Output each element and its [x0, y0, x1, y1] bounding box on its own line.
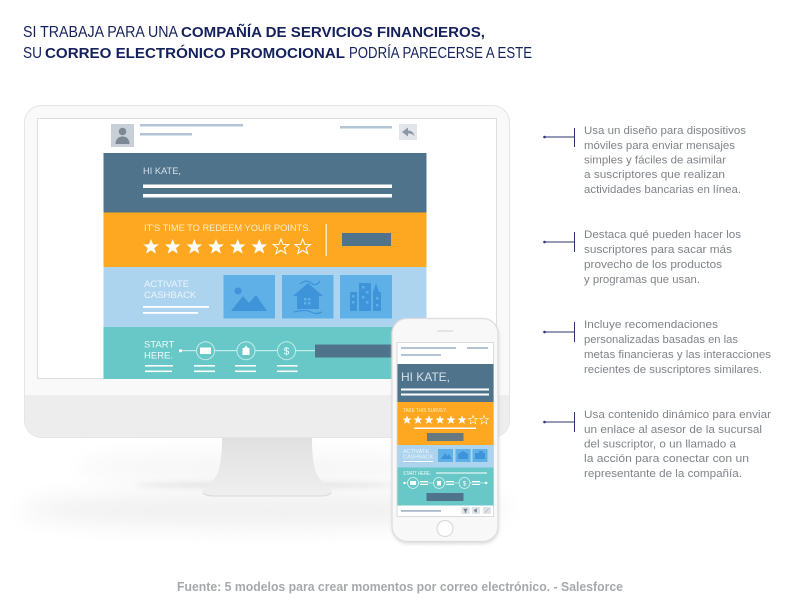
- callout text 3: Incluye recomendaciones: [584, 319, 719, 331]
- callout text 3: recientes de suscriptores similares.: [584, 364, 762, 376]
- title: SI TRABAJA PARA UNA: [23, 24, 179, 41]
- email band: redeem points: IT'S TIME TO REDEEM YOUR POINTS.: [144, 223, 311, 233]
- floor shadow: [20, 452, 510, 527]
- phone body: [392, 318, 499, 544]
- email band: activate cashback: [104, 267, 426, 327]
- callout text 1: Usa un diseño para dispositivos: [584, 125, 747, 137]
- email band: start here: HERE.: [144, 350, 173, 362]
- connector 1: [543, 128, 575, 147]
- callout text 2: provecho de los productos: [584, 259, 723, 271]
- star rating: [143, 239, 311, 254]
- phone band: cashback: [398, 445, 494, 468]
- callout text 2: [584, 229, 742, 286]
- phone header lines: [401, 347, 488, 356]
- email band: activate cashback: ACTIVATE: [144, 279, 189, 290]
- phone band: cashback: CASHBACK: [403, 454, 434, 460]
- icon: house: [282, 275, 334, 318]
- icon: city: [340, 275, 392, 318]
- smartphone: [392, 318, 499, 544]
- title: CORREO ELECTRÓNICO PROMOCIONAL: [45, 44, 345, 62]
- email band: redeem points: [104, 212, 426, 267]
- callout text 4: [584, 409, 771, 480]
- title: PODRÍA PARECERSE A ESTE: [349, 45, 532, 62]
- callout text 2: y programas que usan.: [584, 274, 700, 286]
- icon: avatar: [111, 124, 134, 147]
- callout text 4: representante de la compañía.: [584, 468, 742, 480]
- monitor body: [24, 106, 510, 438]
- icon: step bag: [237, 342, 255, 360]
- phone band: start here: START HERE.: [403, 471, 431, 477]
- callout text 4: un enlace al asesor de la sucursal: [584, 424, 762, 436]
- email band: activate cashback: CASHBACK: [144, 290, 197, 301]
- phone toolbar: [401, 507, 491, 514]
- callout 1: [543, 125, 747, 196]
- desktop monitor: [24, 106, 510, 496]
- icon: step dollar: [278, 342, 296, 360]
- email band: greeting: HI KATE,: [143, 166, 181, 176]
- phone band: survey: [398, 402, 494, 445]
- connector 2: [543, 232, 575, 252]
- email header: [111, 124, 417, 147]
- phone band: start here: $: [463, 482, 467, 488]
- email band: start here: START: [144, 340, 174, 350]
- email band: start here: [104, 327, 426, 379]
- callout text 1: [584, 125, 747, 196]
- callout text 1: actividades bancarias en línea.: [584, 184, 741, 196]
- callout text 3: metas financieras y las interacciones: [584, 349, 772, 361]
- phone band: greeting: [398, 364, 494, 402]
- callout text 4: la acción para conectar con un: [584, 453, 749, 465]
- callout 2: [543, 229, 742, 286]
- callout text 3: personalizadas basadas en las: [584, 334, 739, 346]
- callout text 2: Destaca qué pueden hacer los: [584, 229, 742, 241]
- callout text 2: suscriptores para sacar más: [584, 244, 733, 256]
- title: SU: [23, 45, 42, 62]
- phone band: survey: TAKE THIS SURVEY.: [403, 408, 447, 414]
- source footer: Fuente: 5 modelos para crear momentos por correo electrónico. - Salesforce: [177, 580, 623, 594]
- phone band: greeting: HI KATE,: [401, 370, 450, 384]
- callout text 4: Usa contenido dinámico para enviar: [584, 409, 771, 421]
- icon: step card: [196, 342, 214, 360]
- callout 3: [543, 319, 772, 376]
- callout text 4: del suscriptor, o un llamado a: [584, 438, 737, 450]
- email band: greeting: [104, 153, 426, 212]
- callout 4: [543, 409, 771, 480]
- callout text 1: móviles para enviar mensajes: [584, 140, 736, 152]
- title: [23, 23, 532, 62]
- callout text 1: simples y fáciles de asimilar: [584, 154, 726, 166]
- phone band: cashback: ACTIVATE: [403, 449, 429, 455]
- callout text 1: a suscriptores que realizan: [584, 169, 725, 181]
- icon: step dollar: $: [284, 346, 290, 358]
- monitor stand: [202, 438, 332, 496]
- phone star rating: [402, 415, 489, 424]
- connector 3: [543, 322, 575, 342]
- icon: reply: [399, 124, 417, 140]
- icon: picture: [224, 275, 275, 318]
- phone band: start here: [398, 468, 494, 506]
- connector 4: [543, 412, 575, 432]
- title: COMPAÑÍA DE SERVICIOS FINANCIEROS,: [181, 23, 485, 41]
- callout text 3: [584, 319, 772, 376]
